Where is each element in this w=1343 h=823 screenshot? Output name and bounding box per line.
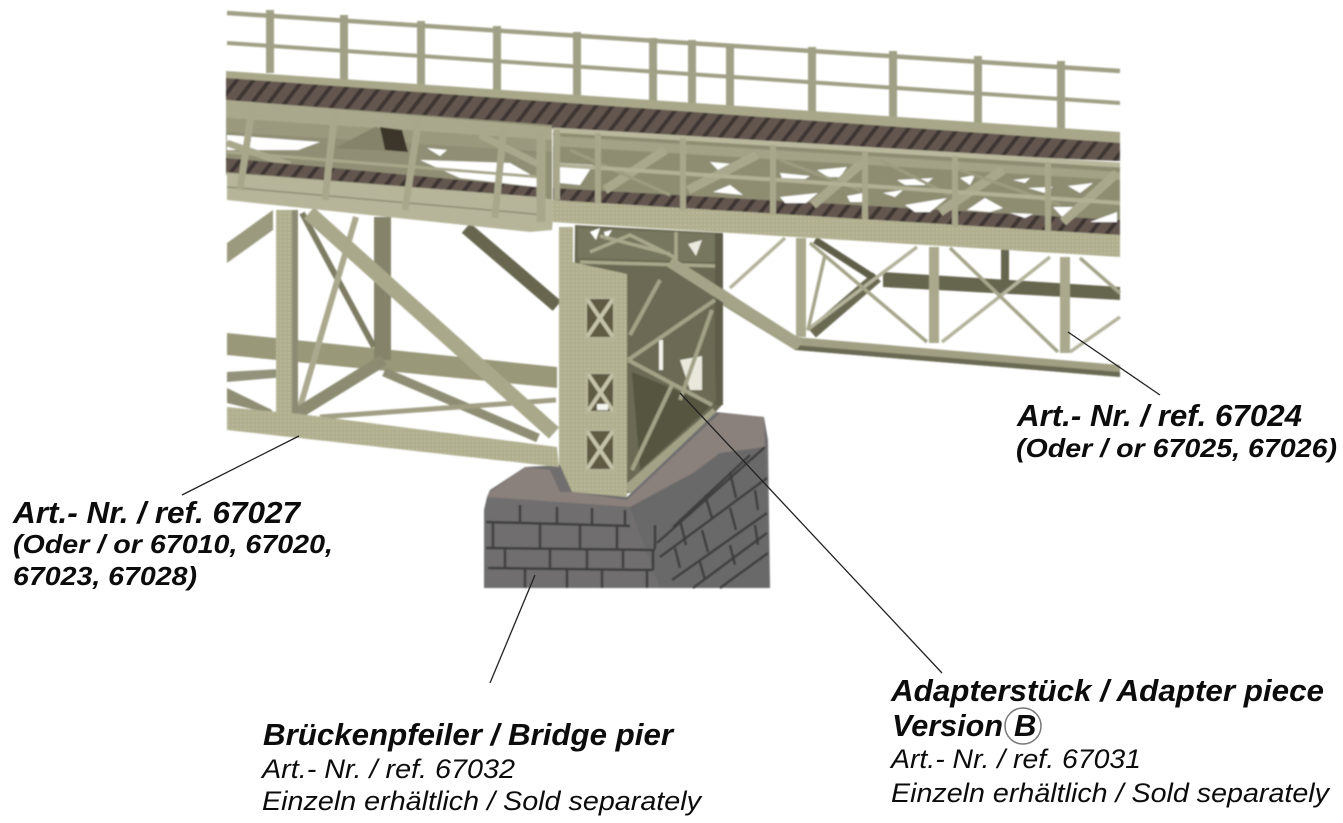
label: 67024	[1016, 398, 1337, 463]
masonry pier	[484, 412, 770, 588]
front-left walkway	[227, 102, 555, 232]
label: bridge pier: Art.- Nr. / ref. 67032	[260, 754, 515, 784]
label: 67027	[12, 495, 333, 591]
left rear truss members	[227, 210, 557, 438]
deck bracing seen between walkways	[226, 100, 552, 200]
label: bridge pier: Brückenpfeiler / Bridge pier	[263, 717, 675, 752]
label: 67024: (Oder / or 67025, 67026)	[1016, 433, 1337, 463]
label: 67027: 67023, 67028)	[13, 561, 197, 591]
leader line: 67027	[182, 436, 299, 495]
rear walkway railing	[227, 10, 1120, 143]
label: bridge pier: Einzeln erhältlich / Sold separately	[262, 786, 703, 816]
label: 67027: Art.- Nr. / ref. 67027	[12, 495, 302, 530]
label: adapter piece: Adapterstück / Adapter piece	[890, 673, 1324, 708]
label: 67024: Art.- Nr. / ref. 67024	[1016, 398, 1302, 433]
bridge pier adapter column	[559, 225, 800, 497]
leader line: adapter piece	[680, 393, 942, 673]
label: 67027: (Oder / or 67010, 67020,	[13, 529, 333, 559]
label: adapter piece: Einzeln erhältlich / Sold separately	[891, 778, 1331, 808]
rear deck	[226, 71, 1120, 161]
label: adapter piece: Version	[892, 708, 1003, 743]
right deck bracing band	[553, 130, 1120, 235]
left truss span	[227, 210, 559, 467]
icon: version circle	[1005, 708, 1041, 744]
label: adapter piece	[889, 673, 1331, 808]
label: adapter piece: B	[1014, 708, 1036, 743]
leader line: bridge pier	[490, 575, 535, 683]
leader line: 67024	[1068, 332, 1160, 395]
label: adapter piece: Art.- Nr. / ref. 67031	[889, 744, 1141, 774]
right truss span	[670, 238, 1120, 377]
front-right walkway with railing	[552, 130, 1120, 257]
label: bridge pier	[260, 717, 703, 816]
bridge model illustration	[226, 10, 1120, 588]
